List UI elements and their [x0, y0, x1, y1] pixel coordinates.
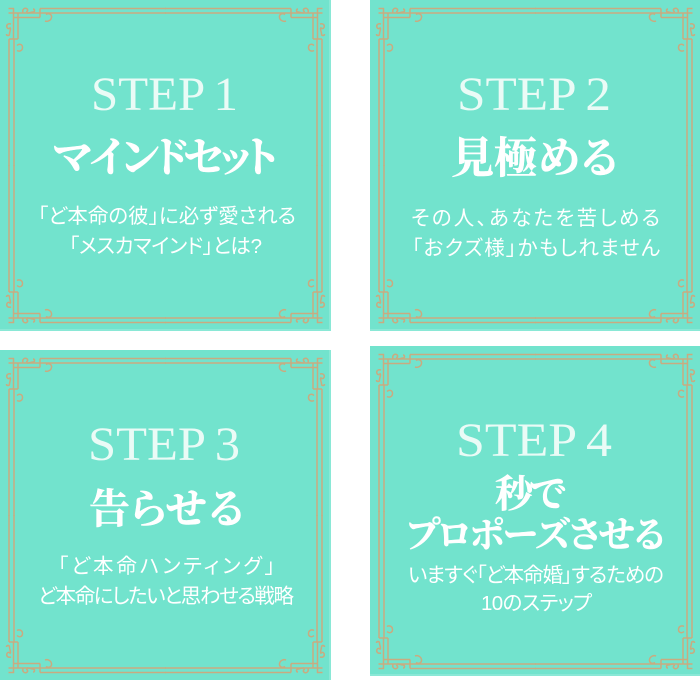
text: step 4 description: 10のステップ: [481, 592, 593, 615]
heading: step 4: STEP 4: [456, 414, 612, 467]
text: step 4 description: いますぐ「ど本命婚」するための: [408, 564, 664, 587]
text: step 1 description: 「メスカマインド」とは?: [69, 235, 262, 258]
text: step 1 description: [38, 205, 296, 258]
text: step 2 description: 「おクズ様」かもしれません: [412, 237, 660, 260]
title: discern: 見極める: [451, 136, 618, 183]
title: make him confess: 告らせる: [89, 486, 244, 532]
panel: step 1: [0, 0, 331, 331]
text: step 4 description: [408, 564, 664, 615]
panel: step 2: [370, 0, 700, 331]
text: step 3 description: [38, 555, 294, 608]
panel: step 3: [0, 350, 331, 680]
title: propose in seconds: [406, 474, 665, 555]
heading: step 3: STEP 3: [88, 418, 240, 471]
title: mindset: マインドセット: [52, 136, 278, 182]
heading: step 1: STEP 1: [91, 68, 238, 121]
text: step 2 description: その人、あなたを苦しめる: [411, 207, 660, 230]
text: step 3 description: 「ど本命ハンティング」: [58, 555, 275, 578]
heading: step 2: STEP 2: [457, 68, 611, 121]
text: step 3 description: ど本命にしたいと思わせる戦略: [38, 585, 294, 608]
title: propose in seconds: 秒で: [495, 474, 566, 516]
panel: step 4: [370, 346, 700, 676]
text: step 1 description: 「ど本命の彼」に必ず愛される: [38, 205, 296, 228]
title: propose in seconds: プロポーズさせる: [406, 515, 665, 555]
text: step 2 description: [411, 207, 660, 260]
